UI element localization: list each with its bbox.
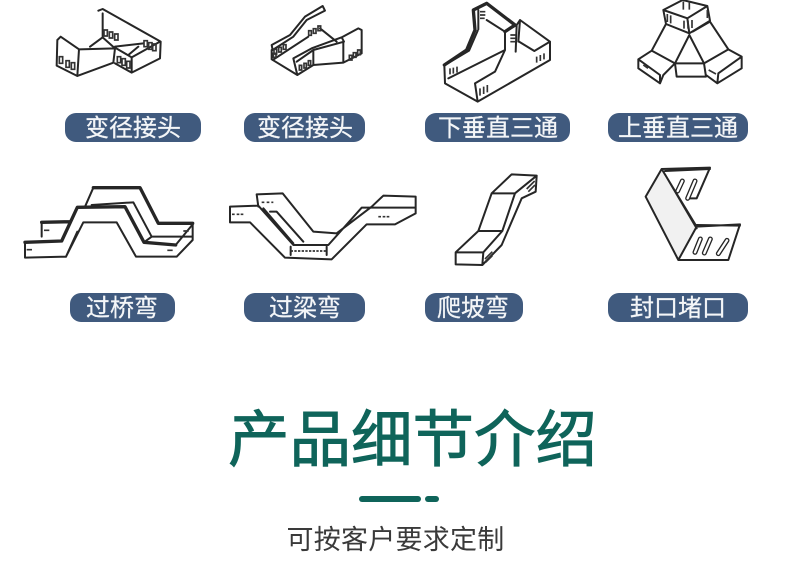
icon: downward vertical tee <box>444 3 550 102</box>
icon: climbing slope bend <box>456 174 537 265</box>
icon: bridge crossing bend <box>25 188 193 258</box>
label: bridge crossing bend: 过桥弯 <box>86 295 158 322</box>
label: end cap: 封口堵口 <box>630 295 726 322</box>
heading: 产品细节介绍 <box>228 406 597 475</box>
label: climbing slope bend: 爬坡弯 <box>437 295 509 322</box>
icon: upward vertical tee <box>638 0 742 83</box>
icon: end cap <box>646 168 740 260</box>
accent bar <box>359 496 439 502</box>
icon: reducer joint 2 <box>272 6 362 75</box>
label: end cap <box>608 293 748 322</box>
label: beam crossing bend <box>244 293 365 322</box>
icon: reducer joint 1 <box>57 9 161 76</box>
label: beam crossing bend: 过梁弯 <box>269 295 341 322</box>
label: reducer joint 1: 变径接头 <box>85 115 181 142</box>
subtitle: 可按客户要求定制 <box>286 525 504 555</box>
label: bridge crossing bend <box>70 293 175 322</box>
label: reducer joint 2: 变径接头 <box>257 115 353 142</box>
label: upward vertical tee: 上垂直三通 <box>618 115 738 142</box>
icon: beam crossing bend <box>230 193 416 259</box>
label: reducer joint 1 <box>65 113 201 142</box>
label: downward vertical tee: 下垂直三通 <box>438 115 558 142</box>
label: climbing slope bend <box>425 293 523 322</box>
